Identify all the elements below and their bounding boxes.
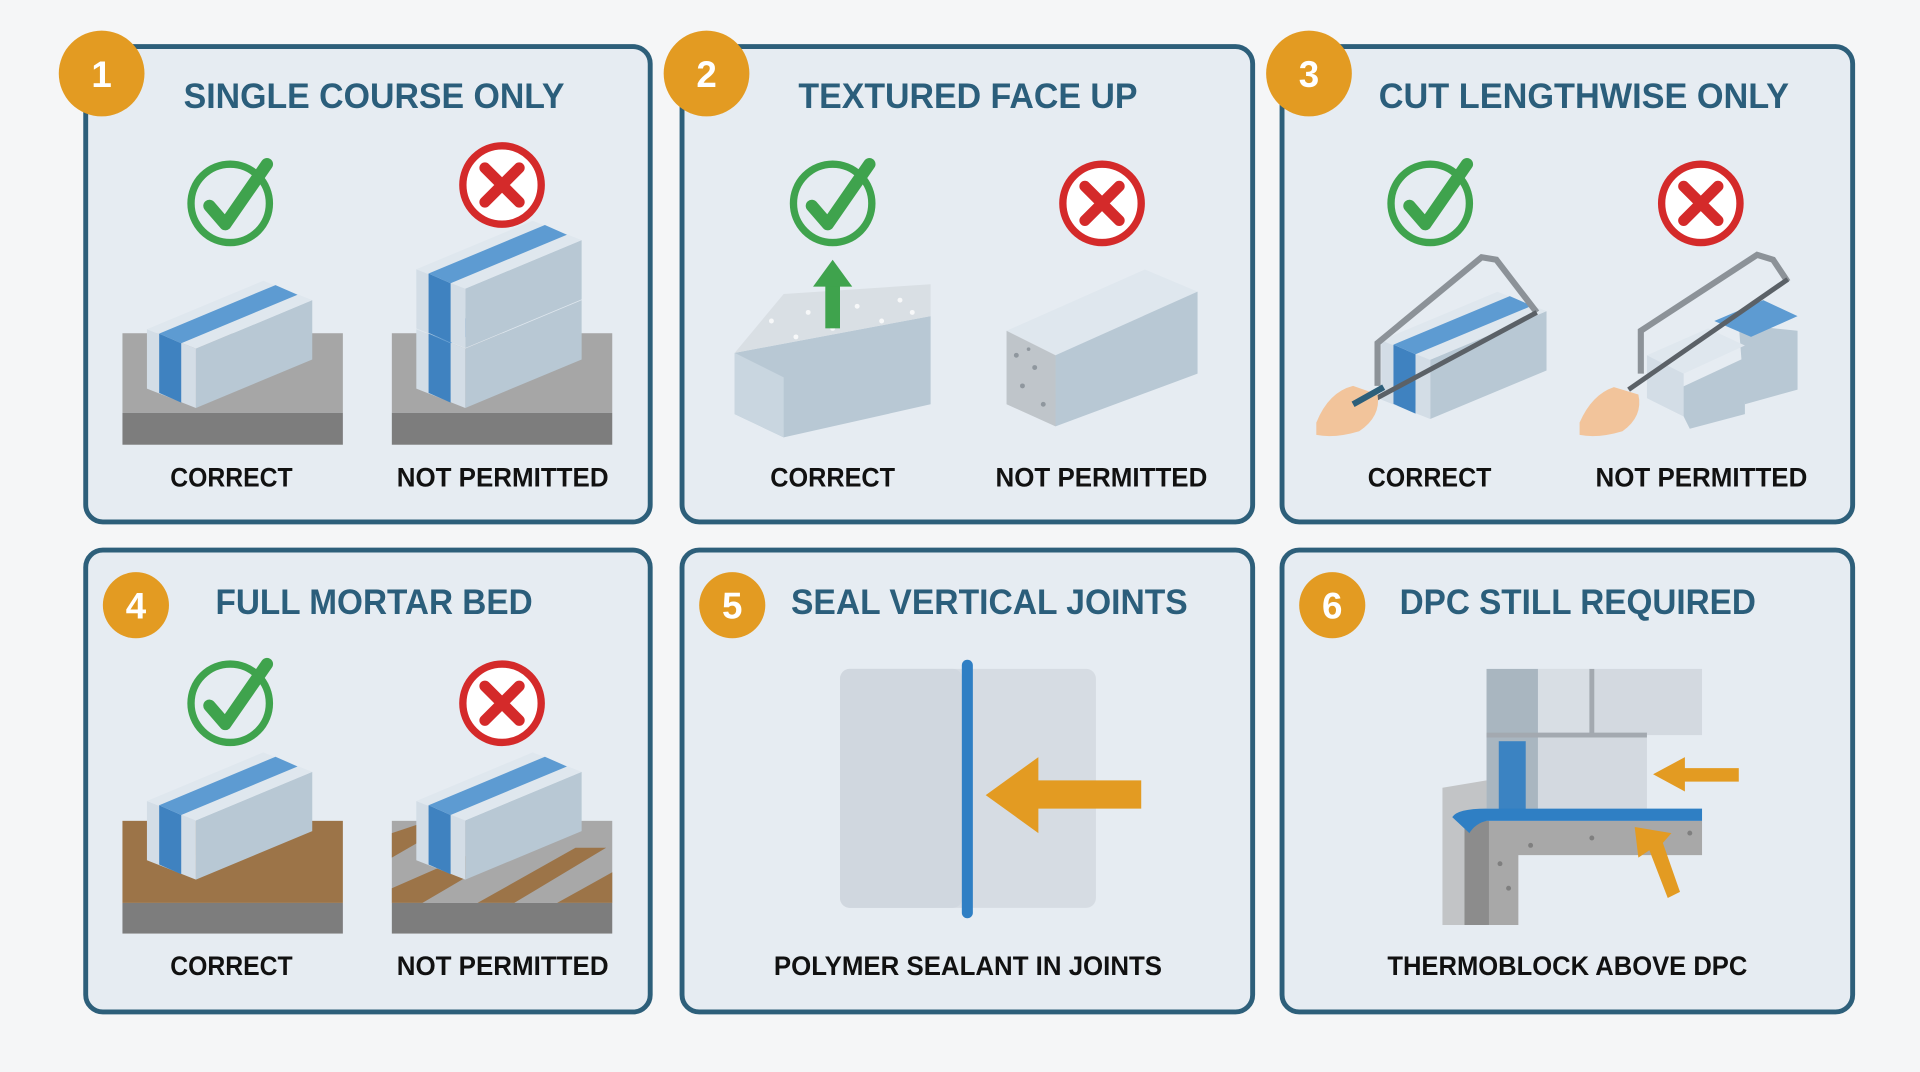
badge 3 (1266, 31, 1352, 116)
badge 5 (699, 572, 765, 638)
badge 5: 5 (722, 586, 742, 627)
illustration: lengthwise saw cut (1316, 257, 1547, 436)
label correct 2: CORRECT (770, 462, 896, 492)
title 4: FULL MORTAR BED (216, 582, 533, 622)
illustration: full mortar bed (122, 752, 343, 934)
label correct 4: CORRECT (170, 951, 293, 981)
badge 4 (103, 572, 169, 638)
illustration: crosswise saw cut (1580, 255, 1798, 436)
label correct 3: CORRECT (1368, 462, 1492, 492)
illustration: correct single block (122, 281, 343, 445)
panel 5: seal vertical joints (682, 550, 1253, 1012)
label polymer sealant: POLYMER SEALANT IN JOINTS (774, 951, 1162, 981)
illustration: wall section with DPC (1442, 669, 1702, 925)
icon: green up arrow (813, 260, 852, 328)
badge 1: 1 (91, 54, 112, 95)
arrow: orange diagonal (1635, 827, 1680, 898)
icon: check 1 (191, 164, 269, 243)
badge 6 (1299, 572, 1365, 638)
arrow: orange into joint (986, 757, 1141, 833)
label not permitted 2: NOT PERMITTED (996, 462, 1207, 492)
illustration: block textured face up (735, 284, 931, 437)
label not permitted: NOT PERMITTED (397, 462, 609, 492)
panel 6: dpc still required (1282, 550, 1853, 1012)
title 1: SINGLE COURSE ONLY (184, 76, 565, 116)
badge 2 (664, 31, 749, 116)
icon: cross 4 (463, 664, 541, 742)
icon: cross 1 (463, 146, 541, 224)
icon: check 4 (191, 664, 269, 742)
illustration: block textured face sideways (1007, 270, 1198, 426)
icon: cross 2 (1063, 164, 1141, 243)
arrow: orange horizontal (1653, 757, 1739, 791)
label correct: CORRECT (170, 462, 293, 492)
illustration: stacked blocks (392, 221, 612, 445)
badge 3: 3 (1299, 54, 1319, 95)
illustration: joint between blocks (840, 665, 1096, 913)
badge 4: 4 (126, 586, 147, 627)
badge 2: 2 (696, 54, 717, 95)
panel 4: full mortar bed (86, 550, 650, 1012)
panel 2: textured face up (682, 47, 1253, 522)
icon: check 3 (1391, 164, 1469, 243)
panel 3: cut lengthwise only (1282, 47, 1853, 522)
title 6: DPC STILL REQUIRED (1400, 582, 1756, 622)
label thermoblock above dpc: THERMOBLOCK ABOVE DPC (1387, 951, 1747, 981)
title 2: TEXTURED FACE UP (798, 76, 1138, 116)
icon: cross 3 (1662, 164, 1740, 243)
title 3: CUT LENGTHWISE ONLY (1379, 76, 1789, 116)
panel 1: single course only (86, 47, 650, 522)
label not permitted 3: NOT PERMITTED (1596, 462, 1807, 492)
label not permitted 4: NOT PERMITTED (397, 951, 609, 981)
icon: check 2 (793, 164, 872, 243)
badge 6: 6 (1322, 586, 1342, 627)
badge 1 (59, 31, 144, 116)
illustration: partial mortar ribbons (392, 752, 612, 934)
title 5: SEAL VERTICAL JOINTS (791, 582, 1188, 622)
